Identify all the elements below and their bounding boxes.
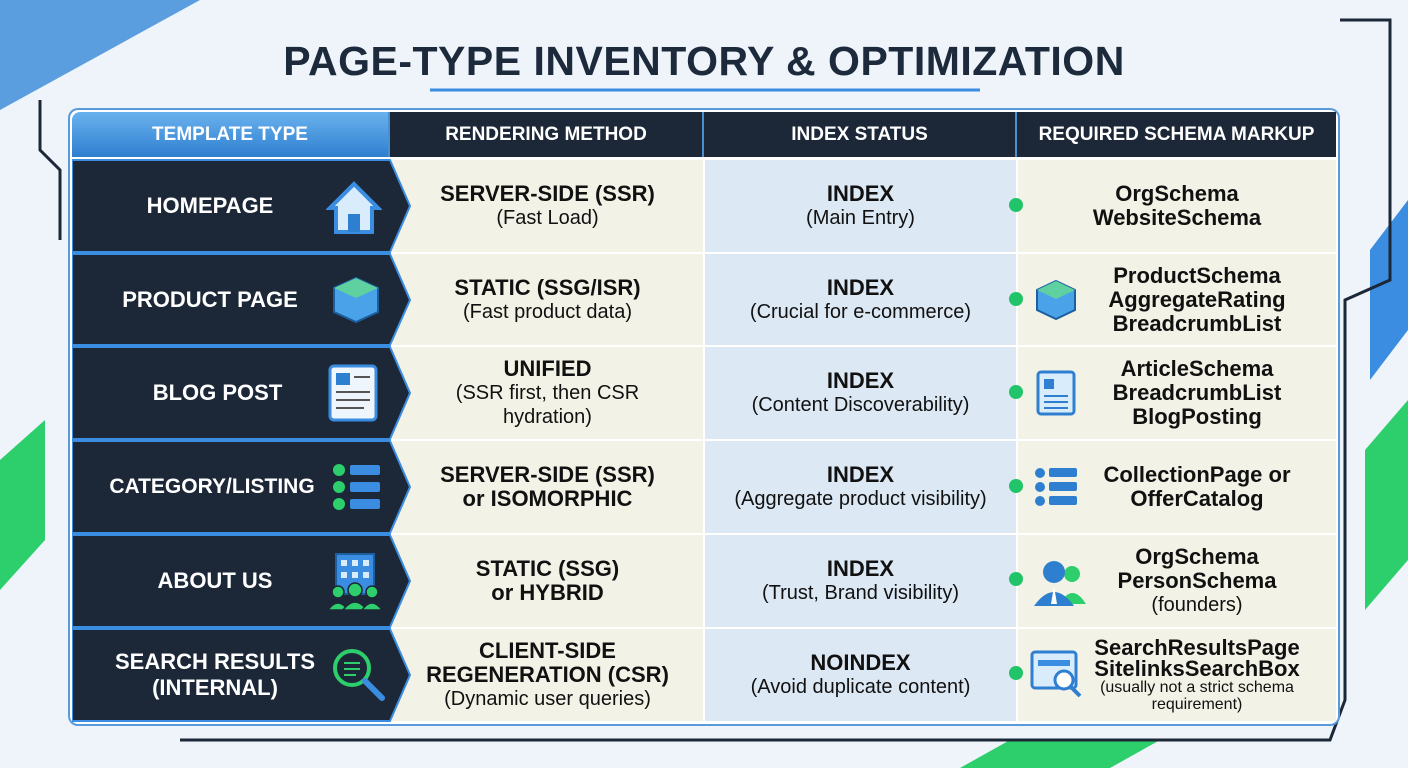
header: template type <box>72 112 390 157</box>
text: INDEX <box>827 556 894 581</box>
text: SitelinksSearchBox <box>1094 656 1300 681</box>
text: BreadcrumbList <box>1113 310 1281 336</box>
text: ArticleSchema <box>1121 356 1273 381</box>
text: OrgSchema <box>1115 181 1239 206</box>
text: ProductSchema <box>1113 262 1281 288</box>
table <box>70 110 1338 724</box>
text: SearchResultsPage <box>1094 635 1300 660</box>
row 2 <box>392 254 703 345</box>
text: INDEX <box>827 368 894 393</box>
row 5: or HYBRID <box>491 580 604 605</box>
header: index status <box>704 112 1017 157</box>
header: rendering method <box>390 112 704 157</box>
icon: box small <box>1036 280 1076 320</box>
green dots <box>1009 198 1023 680</box>
text: (usually not a strict schema <box>1100 679 1294 696</box>
label: homepage: HOMEPAGE <box>147 193 273 218</box>
label: about us: ABOUT US <box>158 568 272 593</box>
row 1: (Fast Load) <box>496 207 599 229</box>
text: AggregateRating <box>1108 286 1286 312</box>
header: schema: REQUIRED SCHEMA MARKUP <box>1039 124 1314 145</box>
text: (Aggregate product visibility) <box>734 488 987 510</box>
icon: magnifier <box>333 649 385 701</box>
icon: list <box>333 464 380 510</box>
text: OrgSchema <box>1135 544 1259 569</box>
label: search results <box>115 649 315 700</box>
row 6: CLIENT-SIDE <box>479 638 616 663</box>
row 3: hydration) <box>503 406 592 428</box>
row 1: SERVER-SIDE (SSR) <box>440 181 655 206</box>
row 3: UNIFIED <box>504 356 592 381</box>
icon: document <box>328 364 378 422</box>
text: (Avoid duplicate content) <box>751 676 970 698</box>
row 2: STATIC (SSG/ISR) <box>454 274 641 300</box>
icon: article <box>1036 370 1076 416</box>
text: (Crucial for e-commerce) <box>750 300 971 322</box>
text: INDEX <box>827 274 894 300</box>
row 6 <box>392 629 703 721</box>
text: (Content Discoverability) <box>752 394 969 416</box>
header: rendering method: RENDERING METHOD <box>445 124 647 145</box>
text: (founders) <box>1151 594 1243 616</box>
text: (Trust, Brand visibility) <box>762 582 959 604</box>
row 6: (Dynamic user queries) <box>444 688 651 710</box>
row 3 <box>392 347 703 439</box>
icon: box <box>333 277 379 323</box>
row 5 <box>392 535 703 627</box>
text: WebsiteSchema <box>1093 205 1261 230</box>
icon: browser search <box>1030 650 1082 698</box>
text: INDEX <box>827 462 894 487</box>
row 4 <box>392 441 703 533</box>
row 4: or ISOMORPHIC <box>463 486 632 511</box>
text: requirement) <box>1152 696 1242 713</box>
label: blog post: BLOG POST <box>153 380 282 405</box>
row 2: (Fast product data) <box>463 300 632 322</box>
icon: house <box>326 181 382 234</box>
text: BlogPosting <box>1132 404 1262 429</box>
text: BreadcrumbList <box>1113 380 1281 405</box>
label: search results: SEARCH RESULTS <box>115 649 315 674</box>
row 5: STATIC (SSG) <box>476 556 619 581</box>
label: search results: (INTERNAL) <box>152 675 278 700</box>
header: schema <box>1017 112 1336 157</box>
label: category: CATEGORY/LISTING <box>109 475 315 498</box>
row 4: SERVER-SIDE (SSR) <box>440 462 655 487</box>
icon: building and people <box>330 553 380 610</box>
icon: list small <box>1035 468 1077 506</box>
icon: people <box>1034 561 1086 606</box>
text: PersonSchema <box>1118 568 1276 593</box>
text: OfferCatalog <box>1130 486 1264 511</box>
text: INDEX <box>827 181 894 206</box>
label: product page: PRODUCT PAGE <box>122 287 298 312</box>
text: (Main Entry) <box>806 207 915 229</box>
title: PAGE-TYPE INVENTORY & OPTIMIZATION <box>283 38 1125 84</box>
row 6: REGENERATION (CSR) <box>426 662 669 687</box>
row 1 <box>392 160 703 252</box>
text: CollectionPage or <box>1103 462 1291 487</box>
row 3: (SSR first, then CSR <box>456 382 639 404</box>
header: template type: TEMPLATE TYPE <box>152 124 308 145</box>
text: NOINDEX <box>810 650 911 675</box>
header: index status: INDEX STATUS <box>791 124 928 145</box>
column 1 chevrons <box>72 159 411 722</box>
